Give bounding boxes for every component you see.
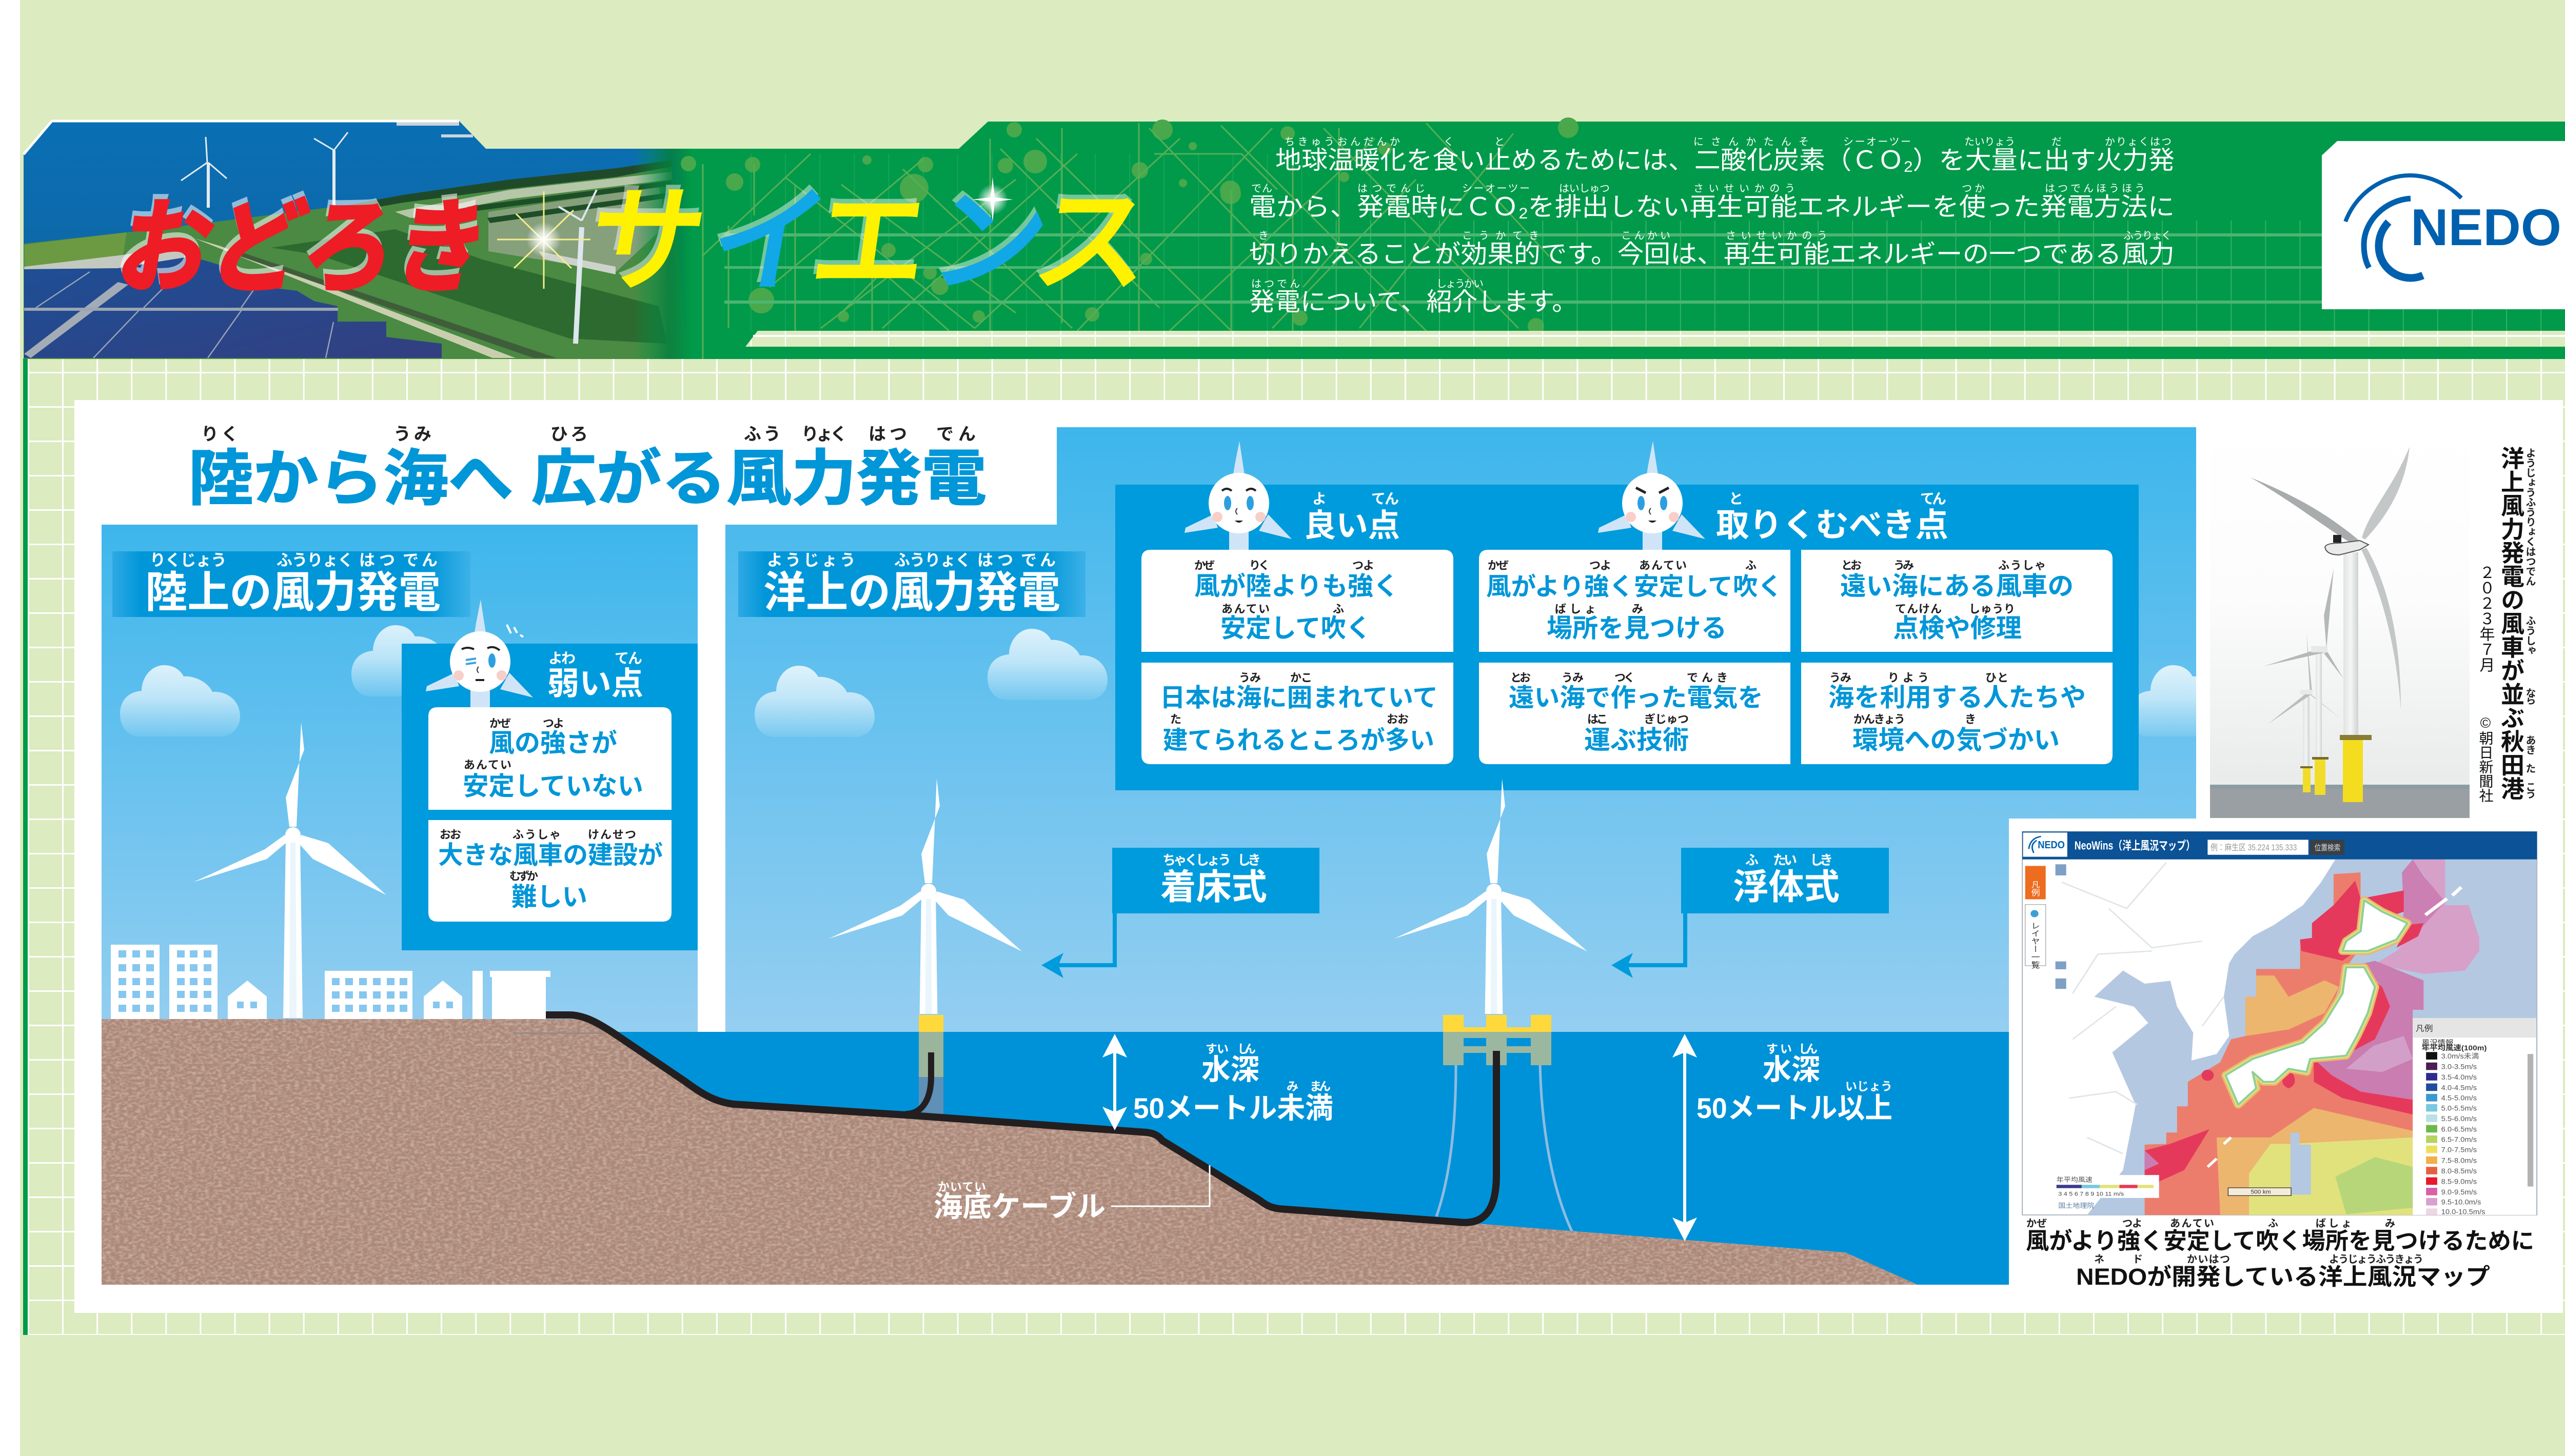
offshore heading furigana: [767, 551, 1056, 569]
arrow: fixed-bottom type: [1041, 913, 1115, 978]
title word: おどろき: おどろき: [110, 191, 497, 305]
mascot: worried windmill: [426, 600, 533, 709]
panel: onshore heading: [112, 551, 470, 617]
panel: good points and challenges: [1115, 441, 2139, 790]
floating foundation: [1436, 1015, 1573, 1234]
map colour scale and scale bar: 年平均風速: [2057, 1176, 2093, 1183]
photo caption vertical: [2477, 446, 2536, 803]
map legend panel: 4.5-5.0m/s: [2441, 1094, 2477, 1102]
paragraph furigana: さいせいかのう: [1726, 230, 1827, 242]
map header bar: 例：麻生区 35.224 135.333: [2211, 843, 2297, 852]
map caption furigana: ふ: [2268, 1218, 2278, 1229]
map header bar: 位置検索: [2315, 843, 2340, 852]
title word: サイエンス: [579, 177, 1158, 306]
weak point card 2: けんせつ: [588, 828, 636, 841]
depth text: under 50 m: すい: [1206, 1042, 1229, 1055]
offshore heading furigana: はつ: [977, 551, 1013, 569]
card: inspection and repair: 遠い海にある風車の: [1840, 572, 2074, 601]
map legend panel: 風況情報: [2422, 1039, 2454, 1047]
wind: coral zone: [2145, 872, 2413, 1215]
header circuit pattern: [681, 117, 1579, 359]
map legend panel: 6.0-6.5m/s: [2441, 1125, 2477, 1133]
card: inspection and repair: しゅうり: [1969, 603, 2015, 615]
offshore heading furigana: ふうりょく: [894, 551, 971, 569]
onshore wind turbine: [193, 722, 386, 1018]
card: environment consideration: [1801, 663, 2113, 764]
main title furigana: [201, 425, 976, 444]
far turbine: [2268, 633, 2342, 792]
map legend panel: 8.5-9.0m/s: [2441, 1178, 2477, 1185]
weak point card 2: ふうしゃ: [512, 828, 561, 841]
card: environment consideration: 海を利用する人たちや: [1828, 683, 2086, 712]
good points heading: 良い点: [1304, 508, 1400, 544]
panel: weak points: [402, 600, 698, 950]
wind map screenshot: [2022, 831, 2537, 1216]
weak point card 2: おお: [440, 828, 461, 841]
photo caption vertical: 洋上風力発電の風車が並ぶ秋田港: [2498, 446, 2524, 800]
main title furigana: ふう: [744, 425, 781, 444]
near turbine: [2251, 447, 2410, 802]
good points heading: [1304, 491, 1400, 544]
map colour scale and scale bar: 国土地理院: [2058, 1202, 2094, 1209]
caption furigana: あき: [2524, 735, 2535, 755]
weak point card 2: 大きな風車の建設が: [438, 842, 663, 869]
title: おどろき サイエンス: [110, 177, 1158, 306]
card: transmission technology: うみ: [1562, 671, 1584, 684]
label: floating type: 浮体式: [1733, 867, 1840, 907]
card: inspection and repair: ふうしゃ: [1998, 559, 2046, 572]
card: find locations: み: [1632, 603, 1643, 615]
weak point card 1: 安定していない: [463, 772, 643, 801]
sea base: [2087, 860, 2537, 1215]
map caption furigana: [2026, 1218, 2423, 1265]
challenges heading: 取りくむべき点: [1716, 507, 1948, 544]
weak point card 1: [428, 707, 672, 810]
map colour scale and scale bar: 3 4 5 6 7 8 9 10 11 m/s: [2058, 1190, 2124, 1197]
map legend panel: 3.0m/s未満: [2441, 1052, 2479, 1060]
main title furigana: りく: [201, 425, 239, 444]
card: surrounded by sea: [1141, 663, 1453, 764]
header photo: wind farm and solar panels: [24, 121, 693, 359]
card: find locations: 風がより強く安定して吹く: [1486, 573, 1783, 601]
NEDO logo: NEDO: [2411, 199, 2561, 256]
paragraph furigana: [1251, 136, 2172, 290]
card: transmission technology: つく: [1614, 671, 1635, 684]
header intro paragraph: ）を大量に出す火力発: [1913, 147, 2175, 174]
photo edge outline: [24, 121, 459, 154]
weak point card 2: 難しい: [511, 883, 587, 911]
middle turbine: [2264, 569, 2343, 795]
header band: [24, 117, 2565, 359]
panel: sky backgrounds: [102, 427, 2196, 1032]
map caption furigana: かぜ: [2026, 1218, 2047, 1229]
card: find locations: ふ: [1745, 559, 1757, 572]
map caption: [2026, 1218, 2534, 1290]
photo caption vertical: ©朝日新聞社: [2478, 715, 2493, 803]
card: find locations: つよ: [1589, 559, 1611, 572]
weak point card 1: 風の強さが: [489, 729, 617, 757]
title word: サイエンス: ス: [1027, 178, 1158, 306]
paragraph furigana: はつでんじ: [1357, 183, 1425, 194]
header intro paragraph: 2: [1518, 205, 1528, 222]
map legend panel: 9.5-10.0m/s: [2441, 1198, 2481, 1206]
map legend panel: 8.0-8.5m/s: [2441, 1167, 2477, 1175]
title word: サイエンス: ン: [924, 178, 1056, 306]
paragraph furigana: ちきゅうおんだんか: [1285, 136, 1400, 148]
wind: yellow zone: [2249, 1138, 2413, 1215]
map caption furigana: つよ: [2122, 1218, 2142, 1229]
label: fixed-bottom type: しき: [1237, 852, 1261, 868]
arrow: floating type: [1611, 913, 1685, 978]
card: transmission technology: とお: [1510, 671, 1531, 684]
card: environment consideration: き: [1965, 713, 1976, 726]
card: stronger stable wind: かぜ: [1194, 559, 1215, 572]
offshore heading furigana: でん: [1021, 551, 1056, 569]
map left toolbar: 凡例: [2030, 881, 2040, 897]
weak point card 1: あんてい: [464, 759, 511, 771]
submarine cable: [546, 1015, 1496, 1223]
map legend panel: 5.0-5.5m/s: [2441, 1104, 2477, 1112]
arrow: depth under 50 m: [1102, 1034, 1127, 1130]
offshore floating wind turbine: [570, 461, 2437, 1239]
weak point card 2: むずか: [509, 870, 538, 883]
caption furigana: ふうしゃ: [2524, 615, 2536, 655]
header intro paragraph: 発電について、紹介します。: [1249, 288, 1577, 316]
paragraph furigana: ふうりょく: [2123, 230, 2172, 242]
sea notch: [2291, 1132, 2311, 1194]
caption furigana: [2524, 448, 2536, 799]
card: surrounded by sea: た: [1170, 713, 1181, 726]
challenges heading: てん: [1920, 491, 1946, 507]
map colour scale and scale bar: 500 km: [2251, 1189, 2271, 1195]
map legend panel: 7.0-7.5m/s: [2441, 1146, 2477, 1153]
label: floating type: しき: [1810, 852, 1833, 868]
seabed ground: [102, 1019, 1918, 1285]
paragraph furigana: にさんかたんそ: [1693, 136, 1809, 148]
card: surrounded by sea: かこ: [1290, 671, 1312, 684]
map legend panel: 3.5-4.0m/s: [2441, 1073, 2477, 1081]
paragraph furigana: つか: [1962, 183, 1985, 194]
caption furigana: こう: [2524, 782, 2535, 799]
white panel: map area: [2009, 819, 2563, 1313]
label: floating type: [1681, 848, 1889, 913]
map caption furigana: ド: [2133, 1254, 2143, 1265]
card: transmission technology: [1479, 663, 1790, 764]
onshore heading furigana: はつ: [359, 551, 395, 569]
mascot: smiling windmill: [1185, 441, 1292, 550]
title word: サイエンス: サ: [579, 177, 715, 305]
card: stronger stable wind: 風が陸よりも強く: [1194, 572, 1399, 601]
card: inspection and repair: てんけん: [1895, 603, 1942, 615]
paragraph furigana: き: [1258, 230, 1269, 242]
card: inspection and repair: とお: [1841, 559, 1862, 572]
depth text: under 50 m: 水深: [1201, 1053, 1259, 1086]
main title furigana: ひろ: [550, 425, 588, 444]
paragraph furigana: シーオーツー: [1462, 183, 1530, 194]
town buildings: [111, 945, 550, 1019]
depth text: 50 m or more: しん: [1799, 1042, 1818, 1055]
depth text: under 50 m: み: [1287, 1080, 1298, 1093]
map caption furigana: み: [2385, 1218, 2395, 1229]
map caption furigana: ようじょうふうきょう: [2329, 1253, 2423, 1265]
main title furigana: はつ: [869, 425, 907, 444]
challenges heading: [1716, 491, 1948, 544]
main white panel: [74, 400, 2563, 1313]
header intro paragraph: 電から、発電時にＣＯ: [1249, 193, 1501, 221]
challenges heading: と: [1729, 491, 1743, 507]
mascot: determined windmill: [1598, 441, 1705, 550]
weak point card 1: かぜ: [489, 717, 511, 730]
map legend panel: 4.0-4.5m/s: [2441, 1084, 2477, 1091]
clouds: [120, 625, 2249, 737]
background grid: [23, 358, 2565, 1335]
depth text: under 50 m: まん: [1310, 1080, 1331, 1093]
offshore heading furigana: ようじょう: [767, 551, 856, 569]
depth text: 50 m or more: [1696, 1042, 1892, 1124]
map caption furigana: かいはつ: [2187, 1254, 2230, 1265]
card: find locations: ばしょ: [1555, 603, 1596, 615]
wind: magenta zone: [2314, 961, 2423, 1100]
title word: サイエンス: エ: [804, 178, 936, 306]
depth text: 50 m or more: すい: [1766, 1042, 1792, 1055]
card: environment consideration: うみ: [1829, 671, 1851, 684]
label: fixed-bottom type: ちゃくしょう: [1162, 852, 1231, 868]
map legend panel: 年平均風速(100m): [2422, 1044, 2487, 1052]
onshore heading furigana: [150, 551, 438, 569]
card: stronger stable wind: りく: [1249, 559, 1270, 572]
paragraph furigana: こうかてき: [1462, 230, 1539, 242]
card: transmission technology: でんき: [1687, 671, 1728, 684]
callout: submarine cable: 海底ケーブル: [934, 1190, 1106, 1223]
map land rivers: [2062, 863, 2224, 1154]
caption furigana: なら: [2524, 688, 2535, 705]
map colour scale and scale bar: [2055, 1175, 2291, 1209]
sea: [610, 1032, 2009, 1285]
map left toolbar: レイヤー一覧: [2030, 922, 2040, 969]
map legend panel: 10.0-10.5m/s: [2441, 1208, 2485, 1216]
card: stronger stable wind: ふ: [1333, 603, 1344, 615]
main title furigana: りょく: [801, 425, 847, 444]
map legend panel: 6.5-7.0m/s: [2441, 1135, 2477, 1144]
label: fixed-bottom type: 着床式: [1160, 867, 1267, 907]
card: inspection and repair: うみ: [1893, 559, 1914, 572]
main title furigana: でん: [936, 425, 976, 444]
paragraph furigana: たいりょう: [1964, 136, 2015, 148]
good points heading: てん: [1371, 491, 1399, 507]
depth text: 50 m or more: 水深: [1763, 1053, 1820, 1086]
card: stronger stable wind: あんてい: [1221, 603, 1270, 615]
card: surrounded by sea: おお: [1387, 713, 1409, 726]
korea: [2170, 963, 2229, 1061]
header intro paragraph: を排出しない再生可能エネルギーを使った発電方法に: [1528, 193, 2175, 221]
header intro paragraph: [1249, 136, 2175, 316]
map caption: NEDOが開発している洋上風況マップ: [2076, 1264, 2490, 1290]
card: find locations: [1479, 550, 1790, 652]
wind: crimson zones: [2300, 881, 2404, 961]
depth text: 50 m or more: 50メートル以上: [1696, 1092, 1892, 1124]
card: find locations: かぜ: [1488, 559, 1509, 572]
offshore fixed-bottom wind turbine: [570, 461, 2437, 1239]
weak points heading: 弱い点: [547, 666, 643, 702]
NEDO logo: [2322, 141, 2565, 309]
card: environment consideration: 環境への気づかい: [1852, 726, 2060, 754]
map caption: 風がより強く安定して吹く場所を見つけるために: [2026, 1228, 2534, 1254]
map legend panel: 5.5-6.0m/s: [2441, 1115, 2477, 1123]
arrow: depth 50 m or more: [1672, 1034, 1697, 1241]
main title: 陸から海へ 広がる風力発電: [188, 445, 986, 513]
card: stronger stable wind: 安定して吹く: [1220, 614, 1371, 643]
card: environment consideration: かんきょう: [1853, 713, 1905, 726]
card: environment consideration: ひと: [1985, 671, 2008, 684]
paragraph furigana: だ: [2051, 136, 2062, 148]
callout: submarine cable: [934, 1165, 1210, 1223]
onshore heading furigana: りくじょう: [150, 551, 227, 569]
map header bar: NEDO: [2038, 839, 2065, 851]
header intro paragraph: 地球温暖化を食い止めるためには、二酸化炭素（ＣＯ: [1275, 147, 1879, 174]
map legend panel: 凡例: [2416, 1024, 2433, 1033]
paragraph furigana: かりょくはつ: [2105, 136, 2172, 148]
panel: offshore heading: [738, 551, 1086, 617]
map header bar: [2022, 831, 2537, 860]
panel: offshore heading: 洋上の風力発電: [763, 568, 1060, 616]
card: surrounded by sea: 建てられるところが多い: [1163, 727, 1434, 754]
wind: green zone: [2335, 1157, 2413, 1214]
label: fixed-bottom type: [1112, 848, 1319, 913]
card: environment consideration: りよう: [1888, 671, 1929, 684]
header photo near turbine: [559, 190, 597, 344]
weak point card 2: [428, 820, 672, 922]
map legend panel: [2413, 1018, 2536, 1216]
paragraph furigana: はつでんほうほう: [2045, 183, 2145, 194]
depth text: under 50 m: 50メートル未満: [1133, 1092, 1333, 1124]
paragraph furigana: さいせいかのう: [1693, 183, 1795, 194]
caption furigana: ようじょうふうりょくはつでん: [2524, 448, 2536, 586]
card: transmission technology: 遠い海で作った電気を: [1509, 684, 1763, 712]
map left toolbar: [2025, 864, 2066, 989]
building windows: [119, 950, 453, 1012]
header intro paragraph: 切りかえることが効果的です。今回は、再生可能エネルギーの一つである風力: [1249, 241, 2175, 268]
fixed-bottom foundation: [919, 1015, 943, 1115]
map legend panel: 7.5-8.0m/s: [2441, 1156, 2477, 1164]
weak points heading: よわ: [548, 650, 576, 666]
card: inspection and repair: 点検や修理: [1893, 614, 2022, 643]
depth text: under 50 m: [1133, 1042, 1333, 1124]
header photo distant turbines: [181, 132, 348, 208]
card: transmission technology: はこ: [1587, 713, 1608, 726]
paragraph furigana: はつでん: [1251, 278, 1300, 290]
weak points heading: [547, 650, 643, 702]
card: find locations: 場所を見つける: [1547, 614, 1727, 643]
wind: light pink zone: [2375, 860, 2479, 974]
label: floating type: ふ: [1745, 852, 1759, 868]
weak points heading: てん: [615, 650, 642, 666]
wind: orange zones: [2245, 975, 2339, 1036]
map header bar: NeoWins（洋上風況マップ）: [2075, 840, 2195, 852]
card: find locations: あんてい: [1639, 559, 1687, 572]
photo caption vertical: ２０２３年７月: [2477, 565, 2495, 672]
onshore heading furigana: でん: [403, 551, 438, 569]
title word: サイエンス: イ: [701, 178, 837, 306]
card: surrounded by sea: 日本は海に囲まれていて: [1160, 684, 1438, 712]
logo arcs: [2345, 175, 2461, 278]
onshore heading furigana: ふうりょく: [277, 551, 353, 569]
good points heading: よ: [1312, 491, 1327, 507]
weak point card 1: つよ: [543, 717, 564, 730]
label: floating type: たい: [1773, 852, 1797, 868]
card: stronger stable wind: [1141, 550, 1453, 652]
japan land with coastal rings: [2207, 887, 2461, 1167]
map caption furigana: ネ: [2094, 1253, 2104, 1265]
card: transmission technology: 運ぶ技術: [1584, 726, 1689, 754]
map caption furigana: あんてい: [2170, 1218, 2214, 1229]
paragraph furigana: と: [1494, 136, 1505, 148]
callout: submarine cable: かいてい: [938, 1180, 986, 1193]
paragraph furigana: はいしゅつ: [1559, 183, 1610, 194]
header intro paragraph: 2: [1904, 158, 1913, 175]
header light stripe: [745, 331, 2565, 347]
card: surrounded by sea: うみ: [1239, 671, 1261, 684]
map legend panel: 3.0-3.5m/s: [2441, 1063, 2477, 1070]
paragraph furigana: でん: [1251, 183, 1272, 194]
card: stronger stable wind: つよ: [1352, 559, 1374, 572]
panel: onshore heading: 陸上の風力発電: [145, 568, 441, 616]
paragraph furigana: しょうかい: [1436, 278, 1484, 290]
paragraph furigana: こんかい: [1621, 230, 1670, 242]
paragraph furigana: シーオーツー: [1843, 136, 1911, 148]
card: inspection and repair: [1801, 550, 2113, 652]
depth text: under 50 m: しん: [1237, 1042, 1256, 1055]
card: transmission technology: ぎじゅつ: [1644, 713, 1689, 726]
map legend panel: 9.0-9.5m/s: [2441, 1188, 2477, 1196]
sparkles: [497, 177, 1013, 289]
caption furigana: た: [2524, 763, 2535, 773]
main title furigana: うみ: [393, 425, 431, 444]
photo: offshore turbines at Akita port: [2210, 426, 2470, 818]
map caption furigana: ばしょ: [2316, 1218, 2352, 1229]
paragraph furigana: く: [1444, 136, 1454, 148]
depth text: 50 m or more: いじょう: [1845, 1080, 1892, 1093]
